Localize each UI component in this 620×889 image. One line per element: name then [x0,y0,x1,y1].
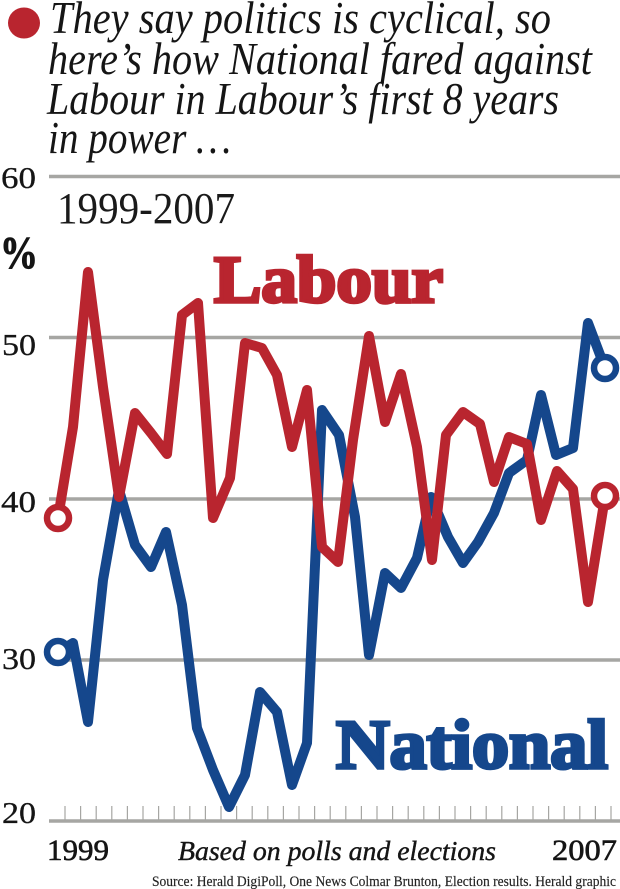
y axis labels: 40 [1,484,36,519]
marker: National 2007 [594,357,616,379]
label: Labour: Labour [214,243,443,317]
line: National [47,323,616,807]
marker: Labour 1999 [47,507,69,529]
title: in power … [48,112,231,163]
x axis label: 1999: 1999 [47,834,109,867]
marker: Labour 2007 [594,485,616,507]
title: Labour in Labour’s first 8 years [46,73,559,124]
note: Based on polls and elections [178,836,496,866]
x axis label: 2007: 2007 [552,834,617,867]
icon: red bullet [8,8,40,38]
y axis labels: 20 [2,795,36,830]
y axis labels [1,160,36,830]
y axis unit: % [0,227,38,278]
date range: 1999-2007 [57,184,235,233]
y axis labels: 50 [2,327,36,362]
header [8,0,593,163]
label: National: National [336,707,608,784]
marker: National 1999 [47,641,69,663]
y axis labels: 30 [2,641,36,676]
line: Labour [47,272,616,602]
chart [0,160,620,867]
title [46,0,593,163]
y axis labels: 60 [1,160,36,195]
